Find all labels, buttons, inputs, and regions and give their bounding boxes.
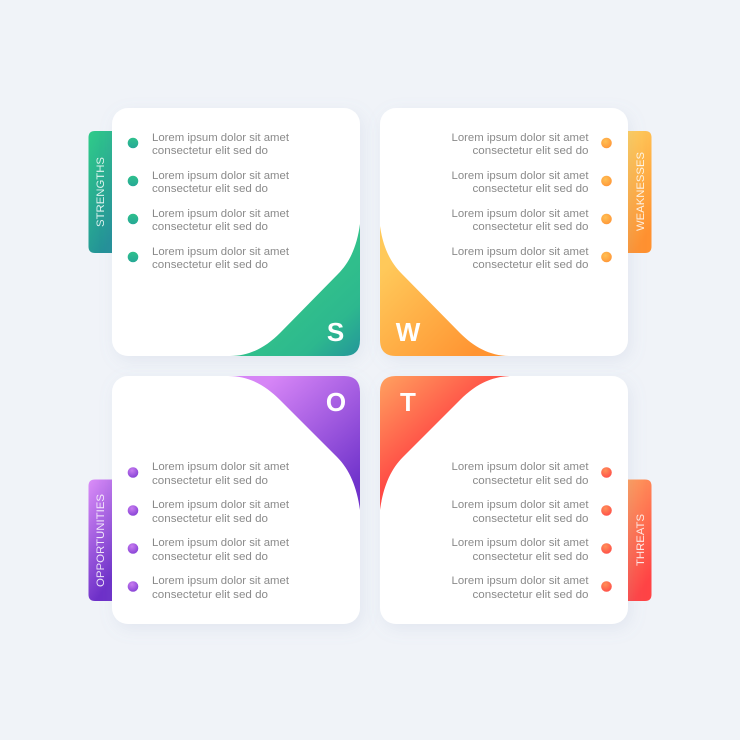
list: strengths	[128, 132, 289, 271]
list: weaknesses: Lorem ipsum dolor sit amet	[452, 246, 588, 258]
list: weaknesses	[452, 132, 612, 271]
tab: opportunities: OPPORTUNITIES	[95, 494, 107, 587]
tab: opportunities	[88, 480, 113, 601]
list: opportunities: consectetur elit sed do	[152, 513, 268, 525]
list: opportunities: Lorem ipsum dolor sit amet	[152, 575, 289, 587]
list: opportunities: Lorem ipsum dolor sit amet	[152, 499, 289, 511]
list: opportunities: consectetur elit sed do	[152, 475, 268, 487]
letter S: S	[327, 317, 344, 347]
corner: opportunities	[228, 376, 360, 510]
list: threats: Lorem ipsum dolor sit amet	[452, 575, 588, 587]
list: weaknesses: consectetur elit sed do	[472, 145, 588, 157]
letter O: O	[326, 387, 346, 417]
card: strengths	[112, 108, 360, 356]
corner: weaknesses	[380, 226, 510, 356]
list: opportunities: Lorem ipsum dolor sit amet	[152, 461, 289, 473]
list: weaknesses: consectetur elit sed do	[472, 183, 588, 195]
list: threats: consectetur elit sed do	[472, 551, 588, 563]
list: strengths: consectetur elit sed do	[152, 145, 268, 157]
panel: threats	[380, 376, 652, 624]
card: opportunities	[112, 376, 360, 624]
list: strengths: Lorem ipsum dolor sit amet	[152, 132, 289, 144]
corner: strengths	[230, 224, 360, 356]
panel: weaknesses	[380, 108, 652, 356]
letter T: T	[400, 387, 416, 417]
panel: strengths	[88, 108, 360, 356]
list: weaknesses: Lorem ipsum dolor sit amet	[452, 132, 588, 144]
list: weaknesses: consectetur elit sed do	[472, 221, 588, 233]
list: strengths: Lorem ipsum dolor sit amet	[152, 208, 289, 220]
list: threats	[452, 461, 612, 601]
list: strengths: consectetur elit sed do	[152, 221, 268, 233]
list: strengths: Lorem ipsum dolor sit amet	[152, 170, 289, 182]
list: opportunities	[128, 461, 289, 601]
tab: threats: THREATS	[635, 514, 647, 566]
panel: opportunities	[88, 376, 360, 624]
corner: threats	[380, 376, 512, 510]
tab: weaknesses: WEAKNESSES	[635, 152, 647, 231]
letter W: W	[396, 317, 421, 347]
list: weaknesses: consectetur elit sed do	[472, 259, 588, 271]
tab: threats	[627, 480, 652, 601]
tab: strengths: STRENGTHS	[95, 157, 107, 227]
card: weaknesses	[380, 108, 628, 356]
list: strengths: Lorem ipsum dolor sit amet	[152, 246, 289, 258]
list: threats: consectetur elit sed do	[472, 589, 588, 601]
list: strengths: consectetur elit sed do	[152, 183, 268, 195]
list: opportunities: consectetur elit sed do	[152, 589, 268, 601]
list: strengths: consectetur elit sed do	[152, 259, 268, 271]
list: threats: consectetur elit sed do	[472, 475, 588, 487]
tab: weaknesses	[627, 131, 652, 253]
card: threats	[380, 376, 628, 624]
tab: strengths	[88, 131, 113, 253]
list: weaknesses: Lorem ipsum dolor sit amet	[452, 170, 588, 182]
list: threats: consectetur elit sed do	[472, 513, 588, 525]
list: threats: Lorem ipsum dolor sit amet	[452, 461, 588, 473]
list: opportunities: Lorem ipsum dolor sit amet	[152, 537, 289, 549]
list: opportunities: consectetur elit sed do	[152, 551, 268, 563]
list: threats: Lorem ipsum dolor sit amet	[452, 537, 588, 549]
list: weaknesses: Lorem ipsum dolor sit amet	[452, 208, 588, 220]
list: threats: Lorem ipsum dolor sit amet	[452, 499, 588, 511]
